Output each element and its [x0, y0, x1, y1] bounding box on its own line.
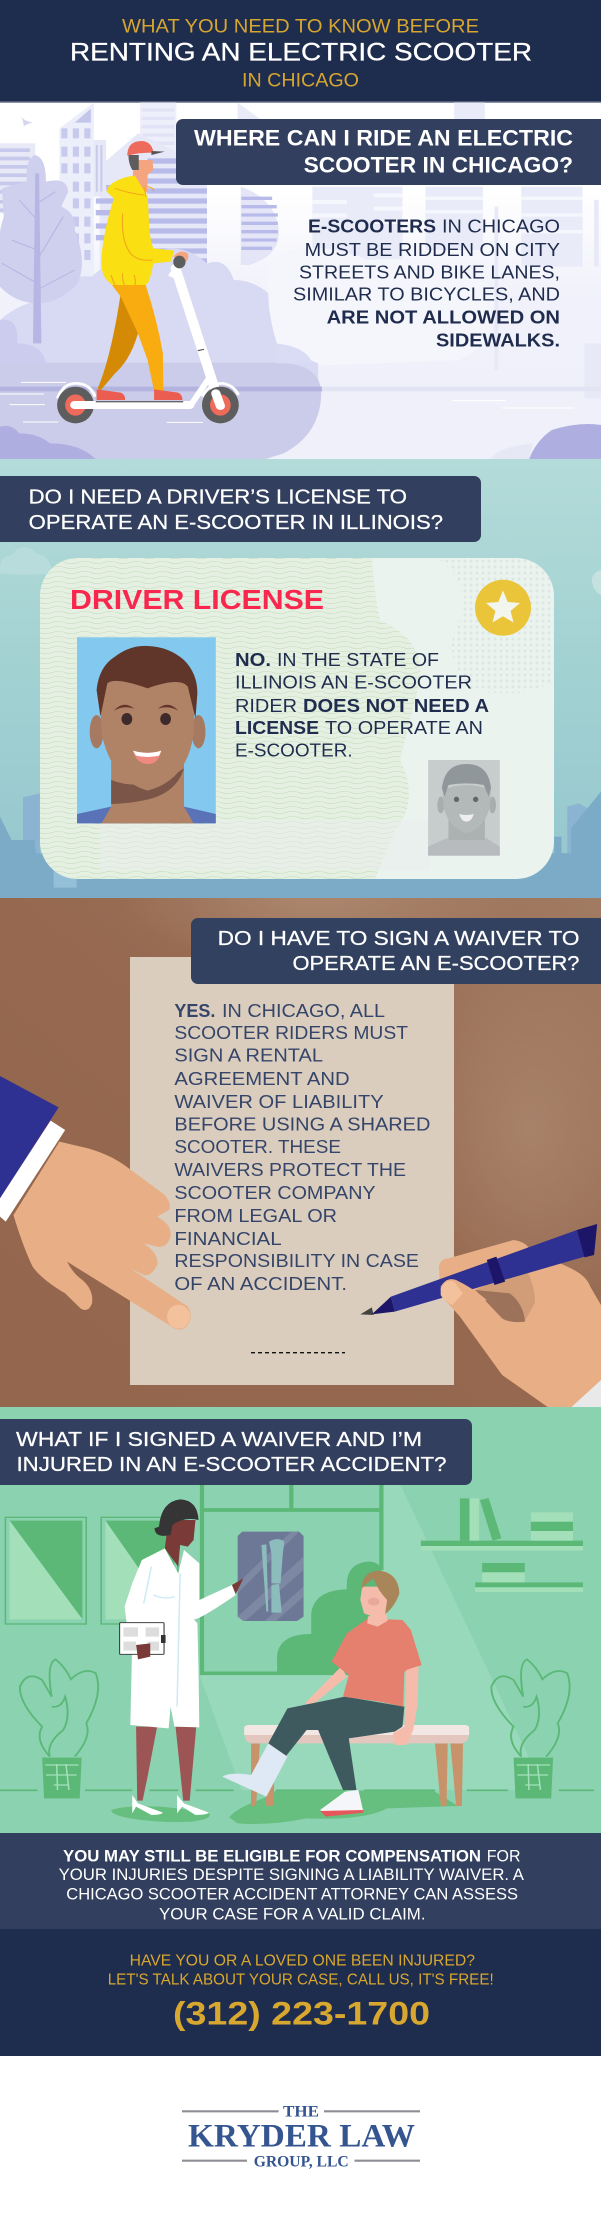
- text: where to ride answer: SIDEWALKS.: [436, 330, 560, 351]
- panel: where can I ride: [0, 103, 601, 460]
- text: waiver answer: BEFORE USING A SHARED: [174, 1114, 430, 1135]
- tree: [0, 155, 82, 303]
- illustration: pointing hand: [0, 1076, 191, 1329]
- text: license answer: E-SCOOTER.: [235, 740, 353, 761]
- logo: The Kryder Law Group: GROUP, LLC: [254, 2154, 349, 2171]
- panel: driver's license: [0, 459, 601, 898]
- text: where to ride answer: SIMILAR TO BICYCLES, AND: [293, 284, 560, 305]
- logo: The Kryder Law Group: KRYDER LAW: [188, 2119, 415, 2155]
- heading: where can I ride: SCOOTER IN CHICAGO?: [304, 152, 573, 177]
- text: license answer: [235, 649, 489, 761]
- heading: waiver: DO I HAVE TO SIGN A WAIVER TO: [218, 927, 579, 950]
- text: waiver answer: RESPONSIBILITY IN CASE: [174, 1250, 419, 1271]
- text: waiver answer: [174, 1000, 430, 1294]
- card title: DRIVER LICENSE: [70, 584, 324, 615]
- panel: header: [0, 0, 601, 103]
- text: where to ride answer: [293, 216, 560, 351]
- text: waiver answer: IN CHICAGO, ALL: [222, 1000, 385, 1021]
- illustration: right plant: [491, 1659, 570, 1798]
- panel: call to action: (312) 223-1700: [173, 1995, 430, 2031]
- heading: license: OPERATE AN E-SCOOTER IN ILLINOIS?: [29, 511, 443, 534]
- panel: compensation note: YOU MAY STILL BE ELIGIBLE FOR COMPENSATION: [63, 1847, 481, 1865]
- illustration: bench and patient: [222, 1571, 469, 1817]
- heading: where can I ride: WHERE CAN I RIDE AN ELECTRIC: [194, 126, 573, 151]
- photo: driver portrait: [77, 637, 216, 823]
- heading: waiver: [191, 918, 601, 984]
- heading: signed waiver: WHAT IF I SIGNED A WAIVER AND I’M: [16, 1428, 422, 1451]
- heading: signed waiver: [0, 1419, 472, 1485]
- photo: ghost portrait: [428, 760, 500, 856]
- text: waiver answer: FINANCIAL: [174, 1228, 282, 1249]
- illustration: hand with pen: [360, 1224, 601, 1407]
- text: waiver answer: WAIVER OF LIABILITY: [174, 1091, 384, 1112]
- panel: header: RENTING AN ELECTRIC SCOOTER: [70, 39, 532, 67]
- panel: compensation note: FOR: [487, 1847, 521, 1865]
- light bush right: [268, 248, 496, 367]
- panel: waiver: [0, 898, 601, 1407]
- text: license answer: ILLINOIS AN E-SCOOTER: [235, 672, 472, 693]
- text: license answer: LICENSE: [235, 717, 319, 738]
- heading: signed waiver: INJURED IN AN E-SCOOTER ACCIDENT?: [16, 1453, 447, 1476]
- signature line: [251, 1352, 345, 1354]
- text: waiver answer: AGREEMENT AND: [174, 1068, 350, 1089]
- illustration: left plant: [20, 1659, 98, 1798]
- ground: [0, 363, 321, 459]
- icon: gold star seal: [475, 580, 531, 636]
- panel: header: WHAT YOU NEED TO KNOW BEFORE: [122, 15, 479, 37]
- panel: compensation note: YOUR CASE FOR A VALID CLAIM.: [159, 1905, 426, 1923]
- text: where to ride answer: IN CHICAGO: [442, 216, 560, 237]
- illustration: doctor: [120, 1499, 243, 1815]
- text: license answer: IN THE STATE OF: [277, 649, 439, 670]
- panel: call to action: LET'S TALK ABOUT YOUR CASE, CALL US, IT'S FREE!: [108, 1971, 494, 1988]
- scooter: [176, 268, 220, 406]
- text: where to ride answer: E-SCOOTERS: [308, 216, 436, 237]
- panel: injured after signing: [0, 1407, 601, 1833]
- license card: [40, 558, 554, 879]
- heading: license: DO I NEED A DRIVER’S LICENSE TO: [29, 486, 407, 509]
- text: license answer: NO.: [235, 649, 271, 670]
- illustration: exam room: [0, 1485, 594, 1824]
- panel: compensation note: [0, 1833, 601, 1929]
- heading: license: [0, 476, 481, 542]
- text: waiver answer: OF AN ACCIDENT.: [174, 1273, 347, 1294]
- text: license answer: TO OPERATE AN: [325, 717, 483, 738]
- logo: The Kryder Law Group: [0, 2056, 601, 2216]
- illustration: city and park background: [0, 103, 601, 459]
- illustration: rider on scooter: [57, 141, 239, 423]
- panel: call to action: HAVE YOU OR A LOVED ONE BEEN INJURED?: [130, 1952, 475, 1969]
- panel: compensation note: YOUR INJURIES DESPITE SIGNING A LIABILITY WAIVER. A: [59, 1866, 524, 1884]
- text: waiver answer: SIGN A RENTAL: [174, 1045, 323, 1066]
- text: where to ride answer: ARE NOT ALLOWED ON: [327, 307, 560, 328]
- text: waiver answer: FROM LEGAL OR: [174, 1205, 337, 1226]
- heading: waiver: OPERATE AN E-SCOOTER?: [292, 952, 580, 975]
- text: license answer: RIDER: [235, 695, 297, 716]
- text: license answer: DOES NOT NEED A: [303, 695, 489, 716]
- text: waiver answer: SCOOTER RIDERS MUST: [174, 1022, 408, 1043]
- document: [130, 957, 454, 1385]
- panel: call to action: [0, 1929, 601, 2056]
- illustration: skyline and clouds: [0, 547, 601, 898]
- bushes: [0, 248, 318, 400]
- panel: compensation note: CHICAGO SCOOTER ACCIDENT ATTORNEY CAN ASSESS: [66, 1885, 518, 1903]
- logo: The Kryder Law Group: THE: [283, 2104, 319, 2121]
- heading: where can I ride: [176, 119, 601, 185]
- text: where to ride answer: STREETS AND BIKE LANES,: [299, 262, 560, 283]
- text: where to ride answer: MUST BE RIDDEN ON CITY: [305, 239, 560, 260]
- panel: header: IN CHICAGO: [242, 69, 359, 91]
- text: waiver answer: SCOOTER. THESE: [174, 1136, 341, 1157]
- text: waiver answer: WAIVERS PROTECT THE: [174, 1159, 406, 1180]
- text: waiver answer: YES.: [174, 1000, 215, 1021]
- text: waiver answer: SCOOTER COMPANY: [174, 1182, 376, 1203]
